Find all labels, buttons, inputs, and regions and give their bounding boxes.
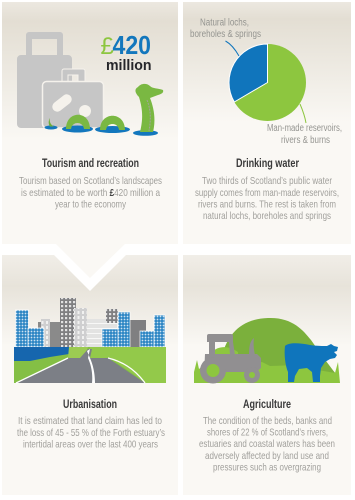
text: tourism body: year to the economy — [55, 198, 127, 210]
illustration: green hill and grass — [194, 318, 340, 383]
illustration: city and road — [14, 298, 166, 383]
figure: 420 million: £ — [100, 33, 114, 60]
figure: 420 million — [100, 30, 152, 74]
icon: loch ness monster — [44, 84, 163, 136]
figure: 420 million: 420 — [112, 30, 151, 60]
icon: large suitcase — [17, 32, 72, 128]
text: agriculture body — [199, 415, 335, 474]
chart: pie of water sources — [229, 44, 306, 121]
label: natural lochs — [190, 18, 261, 40]
label: man-made reservoirs — [267, 123, 342, 146]
panel: tourism background — [2, 2, 178, 278]
heading: agriculture: Agriculture — [243, 399, 291, 411]
heading: tourism: Tourism and recreation — [42, 158, 139, 170]
arrow: blue leader line — [226, 41, 239, 56]
heading: drinking water: Drinking water — [236, 158, 299, 170]
text: tourism body — [19, 175, 162, 210]
text: drinking water body — [195, 175, 339, 222]
label: man-made reservoirs: rivers & burns — [281, 135, 330, 146]
panel: urbanisation background — [2, 255, 178, 495]
figure: 420 million: million — [106, 57, 152, 74]
text: tourism body: Tourism based on Scotland’s landscapes — [19, 175, 162, 187]
panel: drinking water background — [183, 2, 351, 244]
label: natural lochs: boreholes & springs — [190, 29, 261, 40]
icon: small suitcase — [42, 69, 104, 128]
text: tourism body: is estimated to be worth £420 million a — [21, 187, 160, 199]
icon: tractor — [200, 334, 261, 384]
label: natural lochs: Natural lochs, — [200, 18, 249, 28]
text: urbanisation body — [17, 415, 165, 450]
icon: cow — [285, 343, 338, 382]
text: urbanisation body: the loss of 45 - 55 % of the Forth estuary’s — [17, 427, 165, 439]
panel: agriculture background — [183, 255, 351, 495]
text: urbanisation body: It is estimated that land claim has led to — [18, 415, 162, 427]
heading: urbanisation: Urbanisation — [63, 399, 117, 411]
text: urbanisation body: intertidal areas over the last 400 years — [23, 438, 158, 450]
arrow: green leader line — [300, 104, 306, 123]
text: agriculture body: pressures such as overgrazing — [213, 462, 321, 474]
